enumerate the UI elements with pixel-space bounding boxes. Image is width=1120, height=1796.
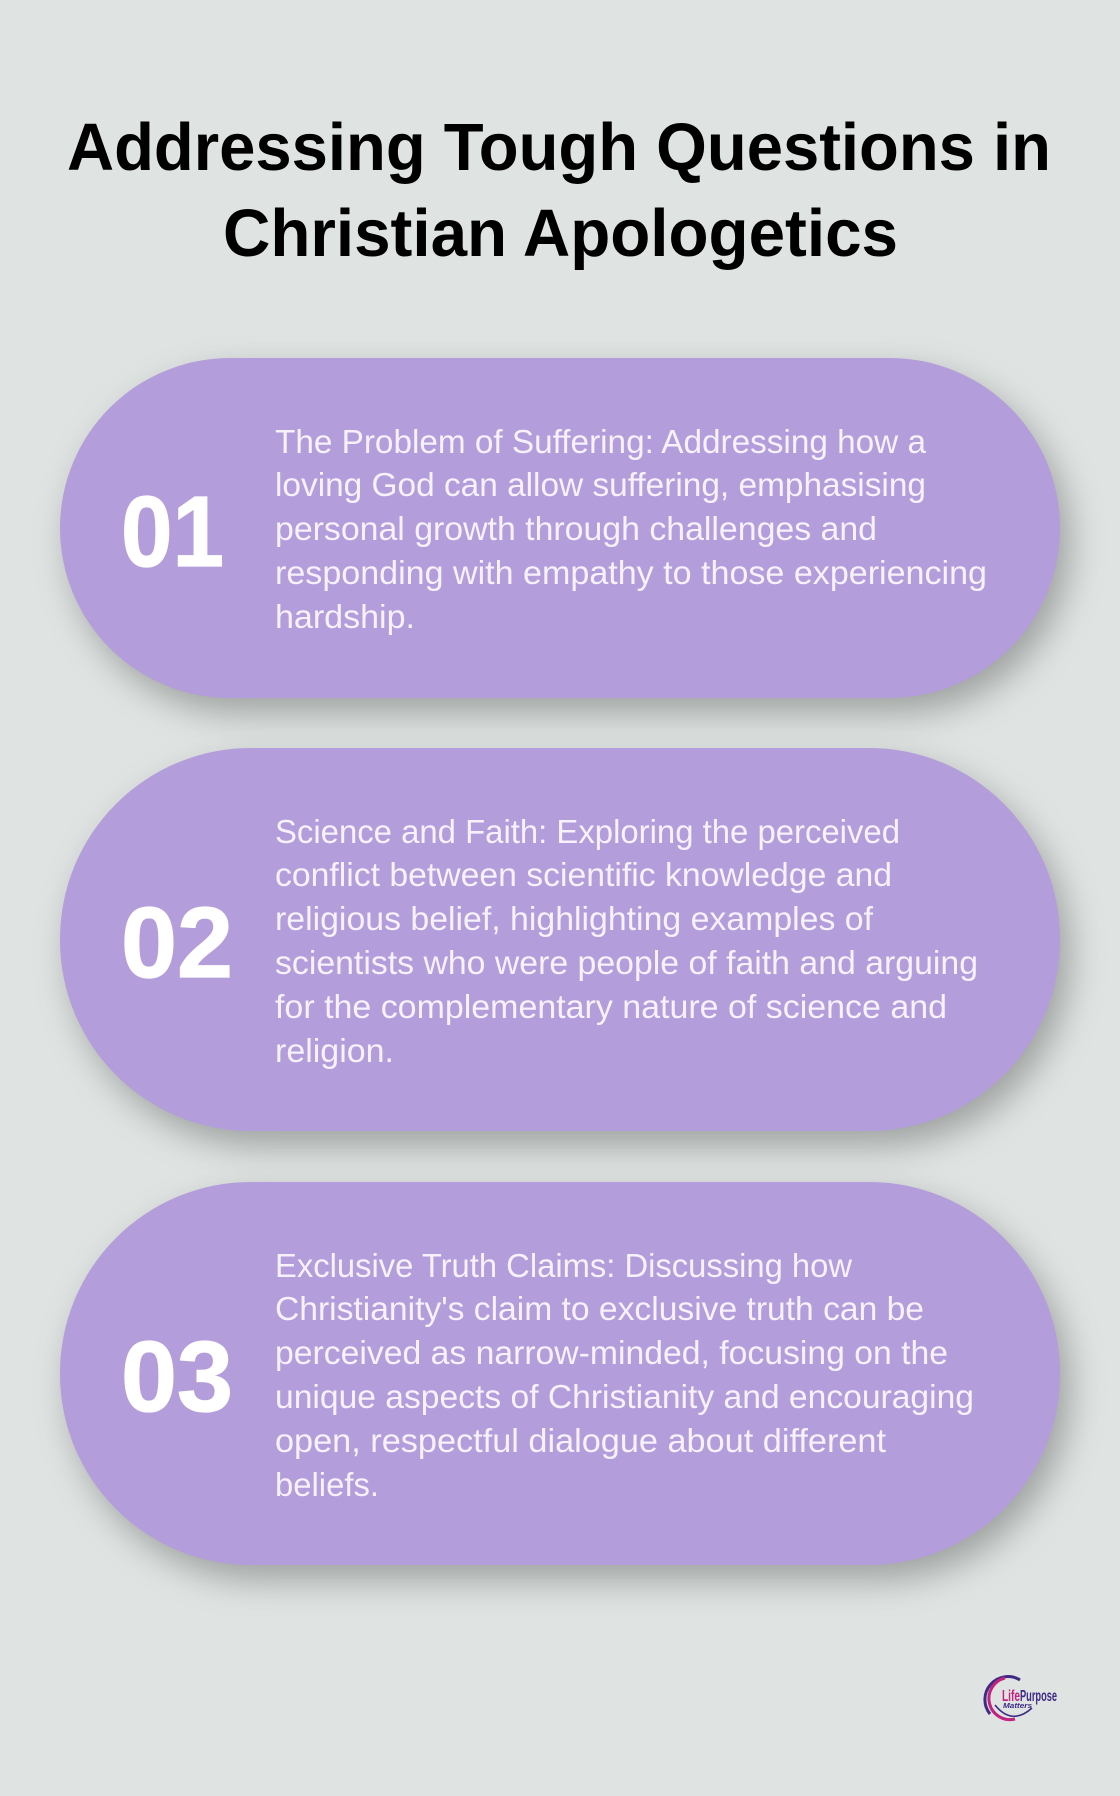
text: exclusive truth claims: Christianity's claim to exclusive truth can be (275, 1290, 924, 1327)
text: science and faith: conflict between scientific knowledge and (275, 856, 892, 893)
number 01: 01 (121, 476, 224, 588)
title: Addressing Tough Questions in (67, 110, 1051, 185)
title (67, 110, 1051, 271)
text: the problem of suffering: responding with empathy to those experiencing (275, 554, 987, 591)
text: science and faith: religion. (275, 1032, 394, 1069)
text: science and faith: religious belief, highlighting examples of (275, 900, 874, 937)
text: exclusive truth claims: beliefs. (275, 1466, 379, 1503)
text: science and faith (275, 813, 978, 1069)
logo: Life Purpose Matters (985, 1677, 1057, 1720)
text: science and faith: for the complementary nature of science and (275, 988, 947, 1025)
title: Christian Apologetics (223, 196, 898, 271)
text: exclusive truth claims (275, 1247, 974, 1503)
text: exclusive truth claims: open, respectful dialogue about different (275, 1422, 886, 1459)
text: the problem of suffering: loving God can allow suffering, emphasising (275, 466, 926, 503)
text: exclusive truth claims: unique aspects of Christianity and encouraging (275, 1378, 974, 1415)
text: exclusive truth claims: perceived as narrow-minded, focusing on the (275, 1334, 948, 1371)
text: the problem of suffering (275, 423, 987, 635)
text: the problem of suffering: The Problem of Suffering: Addressing how a (275, 423, 927, 460)
logo: Life Purpose Matters: Purpose (1020, 1688, 1057, 1705)
panel: science and faith (60, 748, 1070, 1146)
logo: Life Purpose Matters: Matters (1003, 1703, 1032, 1710)
text: science and faith: scientists who were people of faith and arguing (275, 944, 978, 981)
text: exclusive truth claims: Exclusive Truth Claims: Discussing how (275, 1247, 852, 1284)
number 03: 03 (121, 1321, 233, 1433)
number 02: 02 (121, 887, 233, 999)
text: the problem of suffering: hardship. (275, 598, 415, 635)
panel: the problem of suffering (60, 358, 1070, 713)
logo: Life Purpose Matters: Life (1002, 1688, 1020, 1705)
text: science and faith: Science and Faith: Exploring the perceived (275, 813, 900, 850)
text: the problem of suffering: personal growth through challenges and (275, 510, 877, 547)
panel: exclusive truth claims (60, 1182, 1070, 1580)
